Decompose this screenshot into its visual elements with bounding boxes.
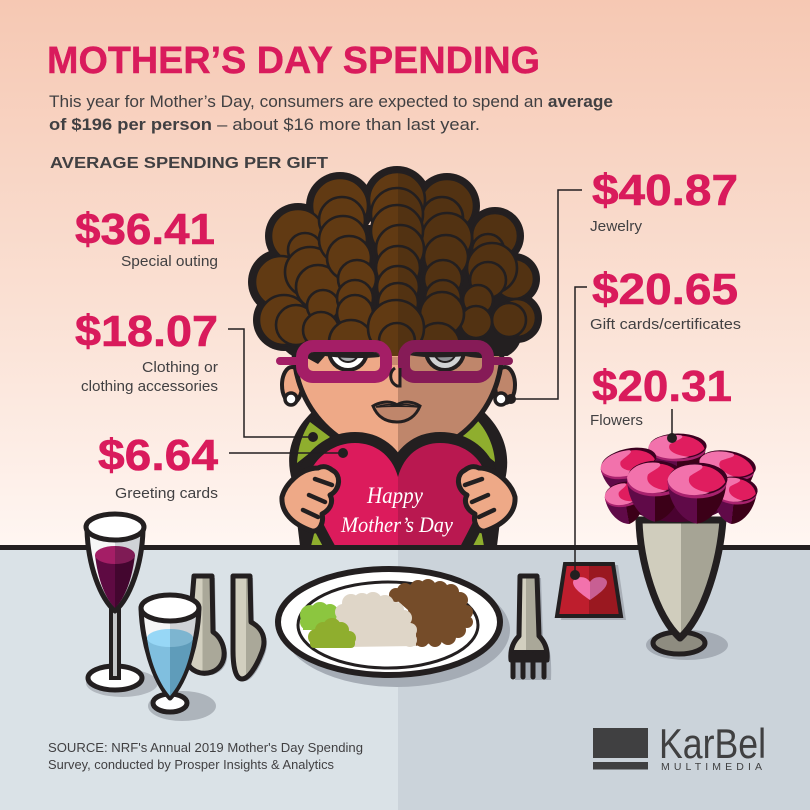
logo: KarBel Multimedia: MULTIMEDIA [661,761,762,773]
right column [423,196,464,226]
heart message: Mother’s Day [340,512,453,537]
logo: KarBel Multimedia [593,720,766,773]
source note: Survey, conducted by Prosper Insights & Analytics [48,757,334,772]
eyes [308,352,482,371]
logo: KarBel Multimedia: KarBel [659,720,766,767]
right hand [458,467,515,531]
left hand [282,467,339,531]
callout: flowers: $20.31 [592,362,732,411]
glasses [276,330,513,377]
mashed potatoes [335,592,417,647]
heart [309,443,486,560]
callout: greeting cards: Greeting cards [115,485,218,502]
wine glass [86,514,158,697]
callout: clothing: clothing accessories [81,378,218,395]
face [292,355,504,452]
background [0,0,810,548]
lips [373,402,420,422]
callout: gift cards: $20.65 [592,265,738,314]
callout: clothing: Clothing or [142,359,218,376]
callout: clothing: $18.07 [75,307,218,356]
brown meat [389,579,473,647]
water glass [141,595,216,721]
heart message: Happy [366,483,424,508]
source note: SOURCE: NRF's Annual 2019 Mother's Day Spending [48,740,363,755]
callout: flowers: Flowers [590,412,643,429]
callout: greeting cards: $6.64 [98,431,219,480]
hair [248,166,542,367]
source note [48,740,363,772]
callout: flowers [590,362,732,443]
callout: greeting cards [98,431,348,502]
far columns [284,246,327,294]
character: woman holding heart [248,166,542,560]
vase shadow [646,630,728,660]
intro text: of $196 per person – about $16 more than last year. [49,115,461,134]
nose [391,368,400,386]
table [0,548,810,810]
title: MOTHER’S DAY SPENDING [47,40,540,82]
callout: special outing: $36.41 [75,205,215,254]
knife [233,576,267,681]
callout: gift cards [570,265,741,580]
callout: jewelry: $40.87 [592,166,738,215]
left column [318,196,366,230]
heart message [340,483,453,537]
callout: clothing [75,307,318,442]
center column [370,173,426,211]
plate of food [278,569,510,687]
vase [639,520,723,654]
spoon [187,576,227,675]
body [289,412,507,546]
subheading: AVERAGE SPENDING PER GIFT [50,155,328,172]
gift card [557,564,626,620]
ears and earrings [282,367,515,405]
roses [598,434,759,527]
callout: jewelry: Jewelry [590,218,642,235]
callout: special outing: Special outing [121,253,218,270]
dark greens [308,618,356,648]
light greens [300,602,338,630]
intro text: This year for Mother’s Day, consumers are expected to spend an average [49,92,612,111]
flowers in vase [598,434,759,660]
table edge [0,545,810,550]
callout: gift cards: Gift cards/certificates [590,316,741,333]
fork [510,576,551,680]
callout: jewelry [506,166,738,404]
outer lobes [313,179,367,216]
